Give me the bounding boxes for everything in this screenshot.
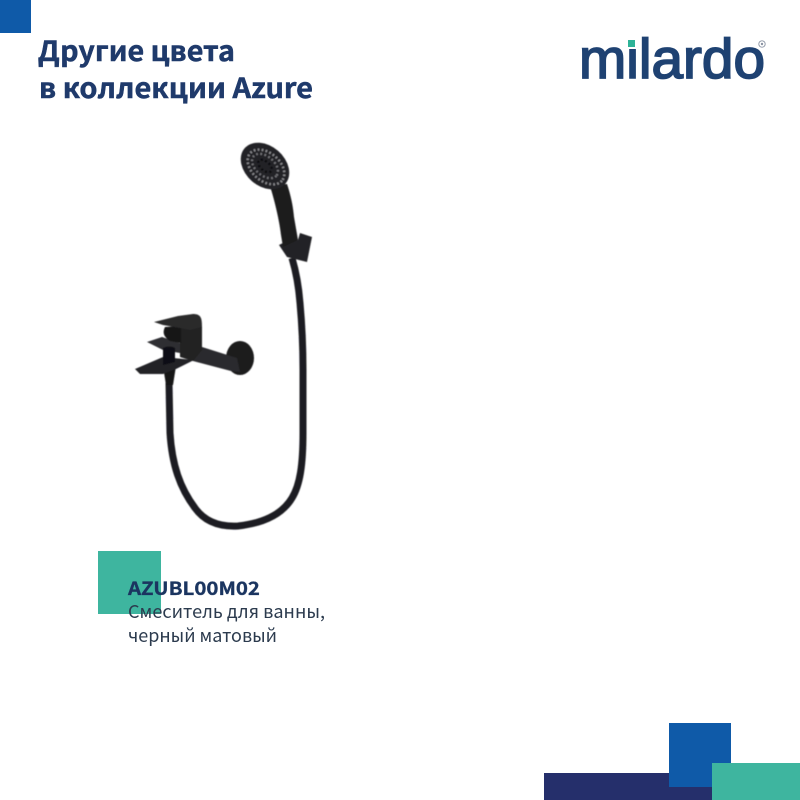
product label: черный матовый [128, 622, 277, 648]
logo: milardo: milardo [579, 27, 765, 90]
product label: Смеситель для ванны, [128, 598, 325, 624]
shower head [232, 133, 298, 199]
shower handle [270, 184, 298, 247]
diverter knob [163, 346, 175, 365]
corner blocks: bottom right [544, 723, 800, 800]
shower hose [169, 258, 303, 526]
product code square [98, 551, 161, 614]
mixer body [180, 326, 202, 361]
product photo: black matte bath mixer with shower set [135, 133, 312, 526]
lever neck [164, 326, 181, 343]
shower holder [279, 233, 312, 262]
lower lever [147, 337, 180, 353]
top lever [154, 314, 202, 330]
product label: AZUBL00M02 [127, 575, 260, 601]
product label [127, 575, 325, 648]
wall flange [226, 341, 254, 375]
title: в коллекции Azure [39, 66, 313, 106]
title [38, 29, 313, 106]
spout [135, 357, 194, 374]
corner square: top left [0, 0, 31, 33]
faucet arm [192, 347, 240, 372]
hose connector [163, 366, 176, 385]
title: Другие цвета [38, 29, 235, 69]
